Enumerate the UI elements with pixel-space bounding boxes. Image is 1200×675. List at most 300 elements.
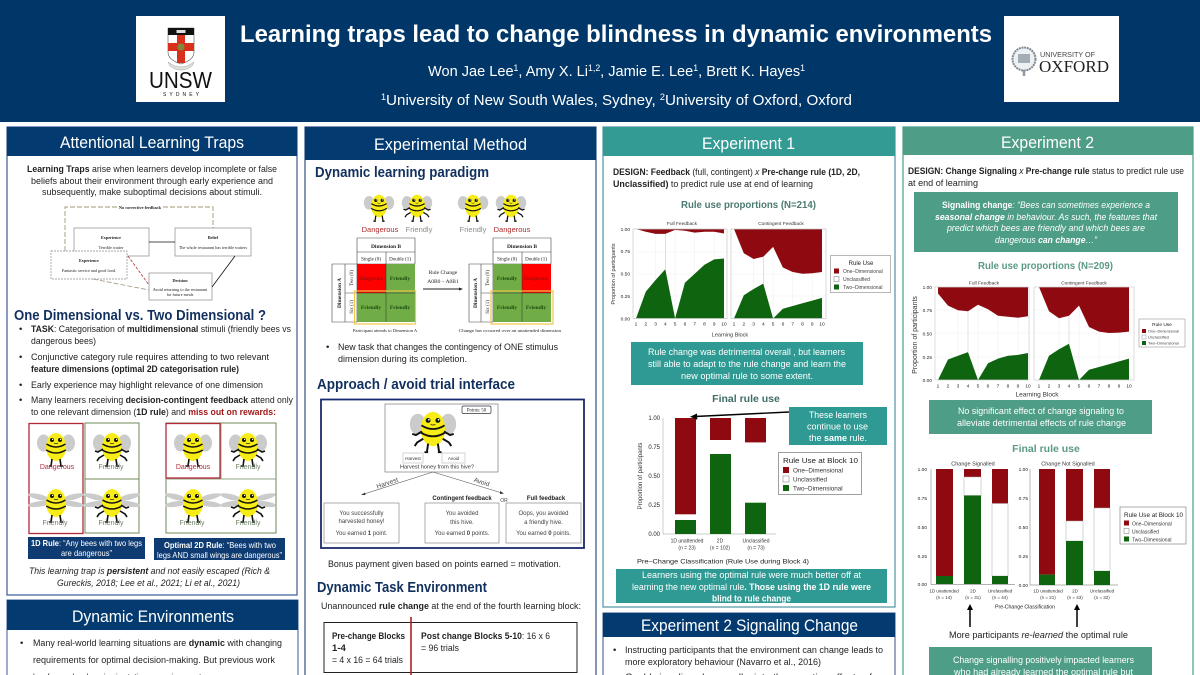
logo: UNSW xyxy=(136,16,225,102)
area chart: experiment 2: 8 xyxy=(1007,384,1010,390)
legend xyxy=(830,256,890,292)
rule table: before change: Friendly xyxy=(390,276,410,282)
block timeline table: Post change Blocks 5-10: 16 x 6 xyxy=(421,631,550,642)
subheading: dynamic task environment: Dynamic Task Environment xyxy=(317,580,487,596)
callout: optimal rule: Learners using the optimal rule were much better off at xyxy=(642,570,861,581)
bees row: Dangerous xyxy=(494,225,531,234)
bar chart: experiment 1: 2D xyxy=(717,538,724,544)
diagram: learning trap flow: Experience xyxy=(79,258,99,263)
area chart: experiment 1: 1.00 xyxy=(621,227,630,233)
bees row xyxy=(362,195,531,234)
bullet list: • xyxy=(19,324,22,335)
bar chart: change signalled: (n = 14) xyxy=(936,595,952,600)
bee grid: 1D rule: Dangerous xyxy=(40,464,75,471)
area chart: experiment 2: 7 xyxy=(1098,384,1101,390)
bee grid: 1D rule: Friendly xyxy=(99,520,124,527)
bar chart: change signalled xyxy=(918,462,1015,600)
bar chart: change not signalled: 0.25 xyxy=(1019,554,1028,560)
heading: Attentional Learning Traps xyxy=(60,133,244,152)
diagram: learning trap flow: Belief xyxy=(208,235,219,240)
bar chart: change signalled: 1D unattended xyxy=(929,588,959,594)
area chart: experiment 1: Contingent Feedback xyxy=(758,221,804,227)
bar chart: experiment 1: Proportion of participants xyxy=(638,443,644,509)
rule table: after change xyxy=(459,238,562,333)
diagram: learning trap flow: Experience xyxy=(101,235,121,240)
area chart: experiment 1: 10 xyxy=(721,322,727,328)
area chart: experiment 1: 0.25 xyxy=(621,294,630,300)
area chart: experiment 1: 0.50 xyxy=(621,272,630,278)
area chart: experiment 1: 1 xyxy=(733,322,736,328)
area chart: experiment 1: 8 xyxy=(703,322,706,328)
branch arrows: Harvest xyxy=(376,477,399,491)
rule label: optimal 2D: legs AND small wings are dangerous” xyxy=(157,550,282,560)
chart heading: Rule use proportions (N=214) xyxy=(681,199,816,211)
intro text: beliefs about their environment through early experience and xyxy=(31,176,273,187)
authors: , Amy X. Li xyxy=(518,63,588,80)
bees row: Dangerous xyxy=(362,225,399,234)
area chart: experiment 2: 3 xyxy=(957,384,960,390)
legend: Unclassified xyxy=(1148,335,1169,340)
feedback box: contingent xyxy=(425,503,499,543)
design text xyxy=(613,167,860,190)
area chart: experiment 1: 8 xyxy=(801,322,804,328)
panel: dynamic environments xyxy=(7,600,298,675)
bar chart: change not signalled: Unclassified xyxy=(1090,588,1115,594)
trial screen: Points: 50 xyxy=(467,409,487,414)
area chart: experiment 1: Full Feedback xyxy=(667,221,698,227)
legend: Unclassified xyxy=(843,277,870,283)
feedback box: full: Oops, you avoided xyxy=(518,511,569,517)
chart heading: Rule use proportions (N=209) xyxy=(978,260,1113,272)
area chart: experiment 1: 1 xyxy=(635,322,638,328)
bullet list: Conjunctive category rule requires attending to two relevant xyxy=(31,352,269,363)
area chart: experiment 2: 9 xyxy=(1118,384,1121,390)
rule label: optimal 2D xyxy=(154,538,285,560)
bullet: new task: New task that changes the contingency of ONE stimulus xyxy=(338,342,558,353)
heading: Experiment 2 Signaling Change xyxy=(641,616,858,635)
feedback box: full xyxy=(506,503,581,543)
body text: • xyxy=(20,638,23,649)
bullet: new task xyxy=(326,342,558,365)
bar chart: change signalled: 0.75 xyxy=(918,496,927,502)
callout: rule change detrimental: Rule change was detrimental overall , but learners xyxy=(648,347,845,358)
bullet list: to one relevant dimension (1D rule) and miss out on rewards: xyxy=(31,407,276,418)
rule label: 1D xyxy=(28,537,145,559)
rule table: before change: Friendly xyxy=(361,305,381,311)
bar chart: change not signalled: 0.75 xyxy=(1019,496,1028,502)
bar chart: experiment 1: 0.75 xyxy=(648,445,661,451)
feedback box: contingent: You avoided xyxy=(446,511,478,517)
diagram: learning trap flow: The whole restaurant has terrible waiters xyxy=(179,245,247,250)
area chart: experiment 2: 0.00 xyxy=(923,378,932,384)
area chart: experiment 2: 1.00 xyxy=(923,285,932,291)
design text xyxy=(908,166,1184,189)
bullet: new task: • xyxy=(326,342,329,353)
legend: One–Dimensional xyxy=(1148,329,1179,334)
arrow: left 2D bar xyxy=(967,604,973,627)
rule table: before change: Participant attends to Dimension A xyxy=(353,328,418,333)
feedback box: harvested: harvested honey! xyxy=(338,519,385,525)
body text: • xyxy=(613,645,616,656)
trial screen: Avoid xyxy=(448,456,460,461)
legend: Rule Use xyxy=(849,261,874,267)
bee grid: optimal 2D rule: Dangerous xyxy=(176,464,211,471)
rule table: after change: Two (0) xyxy=(486,270,491,286)
subheading: dynamic learning paradigm: Dynamic learning paradigm xyxy=(315,165,489,181)
authors: 1 xyxy=(514,63,518,73)
bullet list: • xyxy=(19,352,22,363)
bar chart: change signalled: Change Signalled xyxy=(951,462,995,468)
axis label: Pre-Change Classification xyxy=(995,604,1055,610)
annotation: re-learned: More participants re-learned the optimal rule xyxy=(949,630,1128,641)
rule table: after change: Double (1) xyxy=(525,258,547,262)
area chart: experiment 2: 2 xyxy=(947,384,950,390)
area chart: experiment 2: 6 xyxy=(987,384,990,390)
area chart: experiment 2 xyxy=(912,280,1185,398)
bar chart: experiment 1: Pre–Change Classification (Rule Use during Block 4) xyxy=(637,558,809,566)
area chart: experiment 1: 0.00 xyxy=(621,316,630,322)
bar chart: experiment 1: (n = 102) xyxy=(710,546,730,552)
area chart: experiment 2: 3 xyxy=(1058,384,1061,390)
logo: Oxford: OXFORD xyxy=(1039,57,1109,76)
bar chart: experiment 1 xyxy=(637,416,862,566)
area chart: experiment 1: 5 xyxy=(772,322,775,328)
block timeline table: = 96 trials xyxy=(421,643,459,654)
callout: signaling change: predict which bees are friendly and which bees are xyxy=(946,223,1145,234)
feedback box: contingent: You earned 0 points. xyxy=(435,531,490,537)
bee grid: 1D rule: Friendly xyxy=(43,520,68,527)
callout: signaling change xyxy=(914,192,1178,252)
bar chart: change signalled: Unclassified xyxy=(988,588,1013,594)
area chart: experiment 1: 2 xyxy=(644,322,647,328)
callout: same rule xyxy=(789,407,887,445)
branch arrows xyxy=(361,472,504,495)
bar chart: change not signalled: (n = 21) xyxy=(1040,595,1056,600)
bees row: Friendly xyxy=(460,225,487,234)
callout: rule change detrimental: still able to adapt to the rule change and learn the xyxy=(648,359,846,370)
bar chart: experiment 1: (n = 73) xyxy=(747,546,765,552)
trial interface figure: Full feedback xyxy=(527,496,566,502)
bullet list: feature dimensions (optimal 2D categorisation rule) xyxy=(31,364,239,375)
arrow: rule change xyxy=(423,270,463,290)
trial screen: Harvest honey from this hive? xyxy=(400,464,474,470)
area chart: experiment 1: 6 xyxy=(782,322,785,328)
diagram: learning trap flow: No corrective feedback xyxy=(119,205,162,210)
bar chart: change not signalled: Change Not Signalled xyxy=(1041,462,1095,468)
trial interface figure: Contingent feedback xyxy=(432,496,492,502)
diagram: learning trap flow: Terrible waiter xyxy=(99,245,124,250)
legend: Unclassified xyxy=(793,476,827,484)
area chart: experiment 2: Full Feedback xyxy=(969,280,1000,286)
rule label: 1D: 1D Rule: “Any bees with two legs xyxy=(31,538,142,548)
feedback box: full: a friendly hive. xyxy=(524,520,563,526)
callout: optimal rule: blind to rule change xyxy=(712,594,791,604)
area chart: experiment 2: 0.75 xyxy=(923,308,932,314)
arrow: right 2D bar xyxy=(1074,604,1080,627)
rule table: before change: Dimension A xyxy=(337,278,343,308)
body text: Instructing participants that the environment can change leads to xyxy=(625,645,883,656)
design text: DESIGN: Change Signaling x Pre-change rule status to predict rule use xyxy=(908,166,1184,177)
area chart: experiment 2: 1 xyxy=(1038,384,1041,390)
affiliations: 1 xyxy=(381,92,386,102)
heading: Experiment 2 xyxy=(1001,133,1094,152)
bee grid: optimal 2D rule: Friendly xyxy=(180,520,205,527)
logo: Oxford: UNIVERSITY OF xyxy=(1040,50,1095,59)
feedback box: harvested xyxy=(324,503,399,543)
affiliations: 2 xyxy=(660,92,665,102)
callout: optimal rule xyxy=(616,569,887,604)
affiliations: University of New South Wales, Sydney, xyxy=(386,92,660,109)
heading: Experimental Method xyxy=(374,135,527,154)
bar chart: change not signalled: (n = 32) xyxy=(1094,595,1110,600)
bar chart: change not signalled xyxy=(1019,462,1118,600)
rule table: after change: Friendly xyxy=(497,276,517,282)
authors: 1 xyxy=(800,63,805,73)
bees row: Friendly xyxy=(406,225,433,234)
callout: change signalling positively impacted: Change signalling positively impacted learners xyxy=(953,655,1134,666)
area chart: experiment 2: 8 xyxy=(1108,384,1111,390)
bar chart: change signalled: 0.00 xyxy=(918,582,927,588)
bar chart: experiment 1: 0.25 xyxy=(648,503,661,509)
diagram: learning trap flow xyxy=(51,205,251,300)
rule table: before change: Double (1) xyxy=(389,258,411,262)
legend: final rule use: Unclassified xyxy=(1132,530,1159,536)
bar chart: change not signalled: (n = 43) xyxy=(1067,595,1083,600)
legend: Two–Dimensional xyxy=(843,285,882,291)
legend xyxy=(778,452,862,494)
rule table: after change: Dimension B xyxy=(507,244,537,250)
title: Learning traps lead to change blindness in dynamic environments xyxy=(240,21,992,48)
diagram: learning trap flow: for future meals xyxy=(167,292,194,297)
arrow: to 1D bar xyxy=(690,412,789,420)
area chart: experiment 2: 0.50 xyxy=(923,332,932,338)
area chart: experiment 2: 4 xyxy=(1068,384,1071,390)
rule table: after change: Friendly xyxy=(497,305,517,311)
panel: experiment 2 signaling change xyxy=(603,613,895,675)
panel: experiment 1 xyxy=(603,127,895,607)
callout: signaling change: seasonal change in behaviour. As such, the features that xyxy=(935,212,1157,223)
area chart: experiment 1: 3 xyxy=(654,322,657,328)
feedback box: harvested: You successfully xyxy=(339,511,384,517)
callout: signaling change: Signaling change: “Bees can sometimes experience a xyxy=(942,200,1150,211)
bullet list: Early experience may highlight relevance of one dimension xyxy=(31,380,263,391)
trial screen xyxy=(385,404,498,472)
area chart: experiment 1: 4 xyxy=(762,322,765,328)
italic note: This learning trap is persistent and not easily escaped (Rich & xyxy=(29,566,270,577)
callout: same rule: continue to use xyxy=(807,422,868,432)
legend: One–Dimensional xyxy=(793,468,843,474)
authors: 1,2 xyxy=(588,63,600,73)
rule table: before change: Single (0) xyxy=(361,258,381,262)
area chart: experiment 2: 6 xyxy=(1088,384,1091,390)
bee grid: optimal 2D rule: Friendly xyxy=(236,520,261,527)
area chart: experiment 2: 5 xyxy=(1078,384,1081,390)
area chart: experiment 1: Proportion of participants xyxy=(611,243,617,305)
intro text: Learning Traps arise when learners develop incomplete or false xyxy=(27,164,277,175)
italic note: Gureckis, 2018; Lee et al., 2021; Li et al., 2021) xyxy=(57,578,240,589)
authors: , Brett K. Hayes xyxy=(698,63,800,80)
bullet list: • xyxy=(19,380,22,391)
callout: no significant effect: No significant effect of change signaling to xyxy=(958,406,1124,417)
rule table: after change: Dimension A xyxy=(473,278,479,308)
bar chart: change signalled: 2D xyxy=(970,588,977,594)
bar chart: change signalled: (n = 31) xyxy=(965,595,981,600)
legend xyxy=(1139,319,1185,347)
design text: DESIGN: Feedback (full, contingent) x Pre-change rule (1D, 2D, xyxy=(613,167,860,178)
rule table: before change: Six (1) xyxy=(350,300,355,314)
area chart: experiment 2: 5 xyxy=(977,384,980,390)
rule table: after change: Friendly xyxy=(526,305,546,311)
rule change sentence: Unannounced rule change at the end of the fourth learning block: xyxy=(321,601,581,612)
trial screen: Harvest xyxy=(405,456,421,461)
diagram: learning trap flow: Fantastic service and good food. xyxy=(62,268,116,273)
logo: UNSW: SYDNEY xyxy=(163,92,200,98)
area chart: experiment 1: 7 xyxy=(693,322,696,328)
heading: Experiment 1 xyxy=(702,134,795,153)
legend: One–Dimensional xyxy=(843,269,883,275)
panel: experimental method xyxy=(305,127,596,675)
authors: , Jamie E. Lee xyxy=(600,63,693,80)
rule table: before change: Friendly xyxy=(390,305,410,311)
callout: same rule: These learners xyxy=(809,410,867,421)
chart heading: final rule use: Final rule use xyxy=(1012,443,1080,455)
area chart: experiment 1 xyxy=(611,221,890,338)
legend: Rule Use at Block 10 xyxy=(783,456,858,465)
heading: Dynamic Environments xyxy=(72,607,234,626)
area chart: experiment 2: 1 xyxy=(937,384,940,390)
rule label: optimal 2D: Optimal 2D Rule: “Bees with two xyxy=(164,540,276,550)
rule table: before change: Dimension B xyxy=(371,244,401,250)
rule table: before change: Dangerous xyxy=(359,276,383,282)
intro text: subsequently, make suboptimal decisions about stimuli. xyxy=(42,187,262,198)
bullet list xyxy=(19,324,293,418)
area chart: experiment 2: 9 xyxy=(1017,384,1020,390)
block timeline table: 1-4 xyxy=(332,643,347,654)
block timeline table: = 4 x 16 = 64 trials xyxy=(332,655,403,666)
bullet list: Many learners receiving decision-contingent feedback attend only xyxy=(31,395,293,406)
design text: Unclassified) to predict rule use at end of learning xyxy=(613,179,813,190)
bar chart: change signalled: 1.00 xyxy=(918,467,927,473)
bar chart: change not signalled: 1D unattended xyxy=(1033,588,1063,594)
body text xyxy=(613,645,883,675)
body text: requirements for optimal decision-making. But previous work xyxy=(33,655,275,666)
panel: attentional learning traps xyxy=(7,127,297,595)
legend: Two–Dimensional xyxy=(793,486,843,492)
bar chart: experiment 1: Unclassified xyxy=(743,538,770,544)
area chart: experiment 1: 2 xyxy=(742,322,745,328)
legend: Two–Dimensional xyxy=(1148,341,1179,346)
area chart: experiment 1: Learning Block xyxy=(712,332,748,338)
area chart: experiment 2: 0.25 xyxy=(923,355,932,361)
rule label: 1D: are dangerous” xyxy=(61,548,112,558)
bee grid: 1D rule xyxy=(28,423,140,534)
area chart: experiment 2: Learning Block xyxy=(1016,392,1059,398)
bar chart: change not signalled: 2D xyxy=(1072,588,1079,594)
area chart: experiment 2: 10 xyxy=(1025,384,1031,390)
bullet list: • xyxy=(19,395,22,406)
bee grid: optimal 2D rule xyxy=(165,423,276,533)
body text: Many real-world learning situations are dynamic with changing xyxy=(33,638,282,649)
branch arrows: Avoid xyxy=(473,477,491,489)
area chart: experiment 2: 2 xyxy=(1048,384,1051,390)
bullet list: TASK: Categorisation of multidimensional stimuli (friendly bees vs xyxy=(31,324,291,335)
bar chart: change signalled: 0.50 xyxy=(918,525,927,531)
area chart: experiment 1: 0.75 xyxy=(621,249,630,255)
diagram: learning trap flow: Decision xyxy=(172,278,188,283)
bar chart: change not signalled: 0.50 xyxy=(1019,525,1028,531)
logo: UNSW: UNSW xyxy=(149,67,212,93)
area chart: experiment 2: 7 xyxy=(997,384,1000,390)
feedback box: contingent: this hive. xyxy=(450,520,474,526)
legend: final rule use xyxy=(1120,507,1186,544)
bar chart: change signalled: (n = 44) xyxy=(992,595,1008,600)
block timeline table xyxy=(324,617,577,675)
callout: change signalling positively impacted xyxy=(929,647,1152,675)
legend: final rule use: Two–Dimensional xyxy=(1132,538,1171,544)
subheading: one vs two dimensional: One Dimensional vs. Two Dimensional ? xyxy=(14,308,266,324)
area chart: experiment 2: Contingent Feedback xyxy=(1061,280,1107,286)
chart heading: final rule use: Final rule use xyxy=(712,393,780,405)
callout: signaling change: dangerous can change…” xyxy=(995,235,1098,246)
rule table: after change: Dangerous xyxy=(524,276,548,282)
area chart: experiment 1: 4 xyxy=(664,322,667,328)
logo: Oxford xyxy=(1004,16,1119,102)
rule table: after change: Six (1) xyxy=(486,300,491,314)
bar chart: experiment 1: 0.00 xyxy=(648,532,661,538)
body text xyxy=(20,638,282,675)
area chart: experiment 1: 3 xyxy=(752,322,755,328)
rule table: before change: Two (0) xyxy=(350,270,355,286)
italic note xyxy=(29,566,270,589)
bar chart: change signalled: 0.25 xyxy=(918,554,927,560)
header banner xyxy=(0,0,1200,122)
block timeline table: Pre-change Blocks xyxy=(332,631,405,642)
subheading: approach avoid: Approach / avoid trial interface xyxy=(317,377,515,393)
area chart: experiment 2: Proportion of participants xyxy=(912,296,919,374)
area chart: experiment 2: 4 xyxy=(967,384,970,390)
callout: no significant effect xyxy=(929,400,1152,434)
intro text xyxy=(27,164,277,198)
bar chart: experiment 1: 1.00 xyxy=(648,416,661,422)
arrow: rule change: Rule Change xyxy=(429,270,458,276)
bar chart: experiment 1: 1D unattended xyxy=(671,538,704,544)
legend: Rule Use xyxy=(1152,322,1172,328)
area chart: experiment 1: 9 xyxy=(811,322,814,328)
callout: same rule: the same rule. xyxy=(809,433,867,444)
diagram: learning trap flow: Avoid returning to the restaurant xyxy=(153,287,208,292)
rule table: before change xyxy=(332,238,418,333)
bar chart: experiment 1: 0.50 xyxy=(648,474,661,480)
bee grid: 1D rule: Friendly xyxy=(99,464,124,471)
area chart: experiment 1: 10 xyxy=(819,322,825,328)
callout: no significant effect: alleviate detrimental effects of rule change xyxy=(957,418,1126,429)
bonus text: Bonus payment given based on points earned = motivation. xyxy=(328,559,561,570)
bar chart: change not signalled: 0.00 xyxy=(1019,583,1028,589)
feedback box: harvested: You earned 1 point. xyxy=(336,531,388,537)
area chart: experiment 1: 6 xyxy=(684,322,687,328)
callout: rule change detrimental xyxy=(631,342,863,385)
trial interface figure: OR xyxy=(500,498,508,504)
bullet: new task: dimension during its completion. xyxy=(338,354,467,365)
bar chart: change not signalled: 1.00 xyxy=(1019,467,1028,473)
rule table: after change: Change has occurred over an unattended dimension xyxy=(459,328,562,333)
bee grid: optimal 2D rule: Friendly xyxy=(236,464,261,471)
arrow: rule change: A0B0 – A0B1 xyxy=(427,279,459,285)
feedback box: full: You earned 0 points. xyxy=(516,531,571,537)
affiliations: University of Oxford, Oxford xyxy=(665,92,852,109)
authors: 1 xyxy=(693,63,698,73)
body text: more exploratory behaviour (Navarro et al., 2016) xyxy=(625,657,821,668)
